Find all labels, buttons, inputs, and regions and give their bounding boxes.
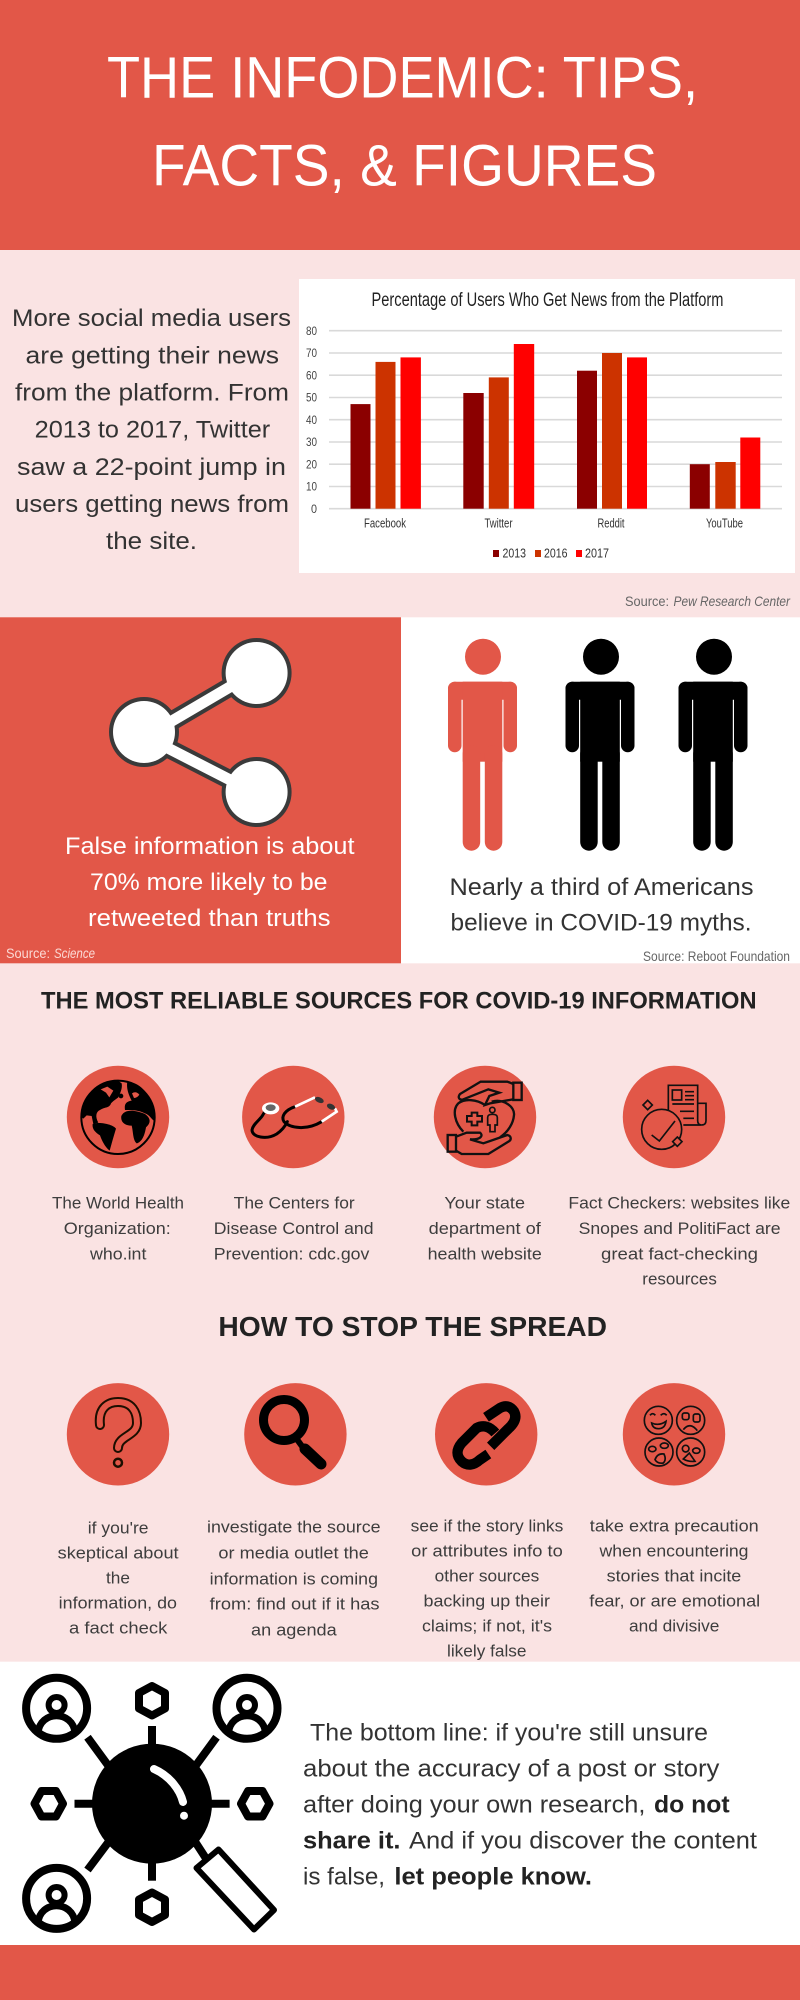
- text: myths statistic: believe in COVID-19 myths.: [450, 910, 752, 937]
- text: myths statistic: Nearly a third of Americans: [450, 874, 754, 901]
- footer banner: [0, 1945, 800, 2000]
- text: check story links: likely false: [447, 1642, 526, 1661]
- text: false information statistic: 70% more likely to be: [90, 869, 328, 896]
- text: Centers for Disease Control: Disease Control and: [214, 1219, 374, 1238]
- text: do a fact check: skeptical about: [58, 1544, 179, 1563]
- text: check story links: see if the story links: [411, 1517, 563, 1536]
- text: take extra precaution: take extra precaution: [590, 1517, 759, 1536]
- text: World Health Organization: The World Health: [52, 1194, 184, 1213]
- bars: 2016: [376, 353, 736, 509]
- text: do a fact check: a fact check: [69, 1619, 168, 1638]
- text: the bottom line: [303, 1720, 757, 1891]
- icon: question mark: [67, 1383, 169, 1486]
- text: fact checkers: resources: [642, 1269, 717, 1288]
- text block: news on social platforms: 2013 to 2017, Twitter: [35, 417, 270, 444]
- text: investigate the source: investigate the source: [207, 1518, 381, 1537]
- heading: how to stop the spread: HOW TO STOP THE SPREAD: [218, 1311, 607, 1342]
- text: World Health Organization: Organization:: [64, 1219, 171, 1238]
- icon: share: [109, 638, 292, 827]
- text: take extra precaution: and divisive: [629, 1617, 719, 1636]
- icon: hands holding heart: [434, 1066, 536, 1168]
- y axis labels: 50: [306, 393, 317, 405]
- title: [107, 46, 698, 199]
- text block: news on social platforms: are getting their news: [26, 342, 279, 369]
- text: take extra precaution: when encountering: [598, 1542, 748, 1561]
- y axis labels: 20: [306, 459, 317, 471]
- text: state department of health: Your state: [444, 1194, 525, 1213]
- title: THE INFODEMIC: TIPS,: [107, 46, 698, 111]
- text: false information statistic: [65, 833, 355, 932]
- legend: 2013: [502, 546, 526, 560]
- text: check story links: backing up their: [424, 1592, 550, 1611]
- text: the bottom line: do not: [654, 1792, 730, 1819]
- text: false information statistic: False information is about: [65, 833, 355, 860]
- y axis labels: 30: [306, 437, 317, 449]
- text: check story links: or attributes info to: [411, 1542, 563, 1561]
- text: do a fact check: information, do: [59, 1594, 177, 1613]
- source: Science: Source:: [6, 945, 50, 961]
- source: Science: Science: [54, 945, 95, 961]
- text: take extra precaution: fear, or are emotional: [589, 1592, 760, 1611]
- heading: most reliable sources: THE MOST RELIABLE SOURCES FOR COVID-19 INFORMATION: [41, 988, 757, 1015]
- icon: chain link: [435, 1383, 537, 1486]
- text: do a fact check: if you're: [88, 1518, 148, 1537]
- category labels: [364, 516, 743, 530]
- text: investigate the source: or media outlet the: [218, 1544, 369, 1563]
- bars: 2017: [400, 344, 760, 509]
- y axis labels: 80: [306, 326, 317, 338]
- text: investigate the source: information is coming: [210, 1569, 378, 1588]
- title: FACTS, & FIGURES: [152, 134, 657, 199]
- text: fact checkers: [568, 1194, 790, 1288]
- text: fact checkers: Snopes and PolitiFact are: [579, 1219, 781, 1238]
- text: Centers for Disease Control: [214, 1194, 374, 1263]
- source: Pew Research Center: Source:: [625, 593, 669, 609]
- category labels: Twitter: [484, 516, 512, 530]
- text: the bottom line: after doing your own research,: [303, 1792, 645, 1819]
- icon: fact check: [623, 1066, 725, 1168]
- text: do a fact check: the: [106, 1569, 130, 1588]
- category labels: YouTube: [706, 516, 743, 530]
- category labels: Reddit: [598, 516, 625, 530]
- icon: globe: [67, 1066, 169, 1168]
- text: false information statistic: retweeted than truths: [88, 905, 330, 932]
- text: state department of health: health website: [428, 1244, 542, 1263]
- icon: virus network with magnifier: [26, 1678, 277, 1930]
- text: the bottom line: let people know.: [394, 1864, 592, 1891]
- text: state department of health: department of: [429, 1219, 541, 1238]
- category labels: Facebook: [364, 516, 407, 530]
- y axis labels: 60: [306, 370, 317, 382]
- legend: 2016: [544, 546, 568, 560]
- icon: stethoscope: [242, 1066, 344, 1168]
- text: fact checkers: Fact Checkers: websites like: [568, 1194, 790, 1213]
- text block: news on social platforms: [12, 305, 291, 555]
- panel: false information: [0, 617, 401, 963]
- text: Centers for Disease Control: The Centers for: [234, 1194, 355, 1213]
- source: Pew Research Center: [625, 593, 791, 609]
- text: fact checkers: great fact-checking: [601, 1244, 758, 1263]
- legend: [493, 546, 609, 560]
- text: World Health Organization: who.int: [89, 1244, 147, 1263]
- text: investigate the source: an agenda: [251, 1621, 337, 1640]
- text: the bottom line: share it.: [303, 1828, 400, 1855]
- icon: magnifying glass: [244, 1383, 347, 1486]
- bar chart: percentage of users who get news from the platform: [299, 279, 795, 573]
- text: investigate the source: from: find out if it has: [210, 1595, 380, 1614]
- text block: news on social platforms: saw a 22-point jump in: [17, 454, 286, 481]
- panel: COVID-19 myths: [401, 617, 800, 964]
- panel: bottom line: [0, 1662, 800, 1945]
- text: Centers for Disease Control: Prevention: cdc.gov: [214, 1244, 370, 1263]
- icon: person black: [678, 639, 748, 851]
- y axis labels: 0: [311, 504, 317, 516]
- y axis labels: 40: [306, 415, 317, 427]
- text: investigate the source: [207, 1518, 381, 1640]
- text block: news on social platforms: from the platform. From: [15, 380, 289, 407]
- text: the bottom line: The bottom line: if you're still unsure: [310, 1720, 708, 1747]
- y axis labels: 10: [306, 482, 317, 494]
- text: the bottom line: is false,: [303, 1864, 385, 1891]
- y axis labels: 70: [306, 348, 317, 360]
- text: check story links: other sources: [435, 1567, 539, 1586]
- text: take extra precaution: stories that incite: [607, 1567, 741, 1586]
- text: World Health Organization: [52, 1194, 184, 1263]
- text block: news on social platforms: the site.: [106, 528, 197, 555]
- bars: 2013: [350, 371, 710, 509]
- y axis labels: [306, 326, 317, 516]
- text: take extra precaution: [589, 1517, 760, 1636]
- icon: person black: [566, 639, 634, 851]
- icon: emotional faces: [623, 1383, 725, 1486]
- text block: news on social platforms: users getting news from: [15, 491, 289, 518]
- source: Science: [6, 945, 95, 961]
- icon: person red: [448, 639, 517, 851]
- text: check story links: [411, 1517, 563, 1661]
- text: check story links: claims; if not, it's: [422, 1617, 552, 1636]
- text block: news on social platforms: More social media users: [12, 305, 291, 332]
- text: the bottom line: about the accuracy of a post or story: [303, 1756, 719, 1783]
- text: do a fact check: [58, 1518, 179, 1638]
- text: state department of health: [428, 1194, 542, 1263]
- legend: 2017: [585, 546, 609, 560]
- header banner: [0, 0, 800, 250]
- text: myths statistic: [450, 874, 754, 937]
- text: the bottom line: And if you discover the content: [409, 1828, 757, 1855]
